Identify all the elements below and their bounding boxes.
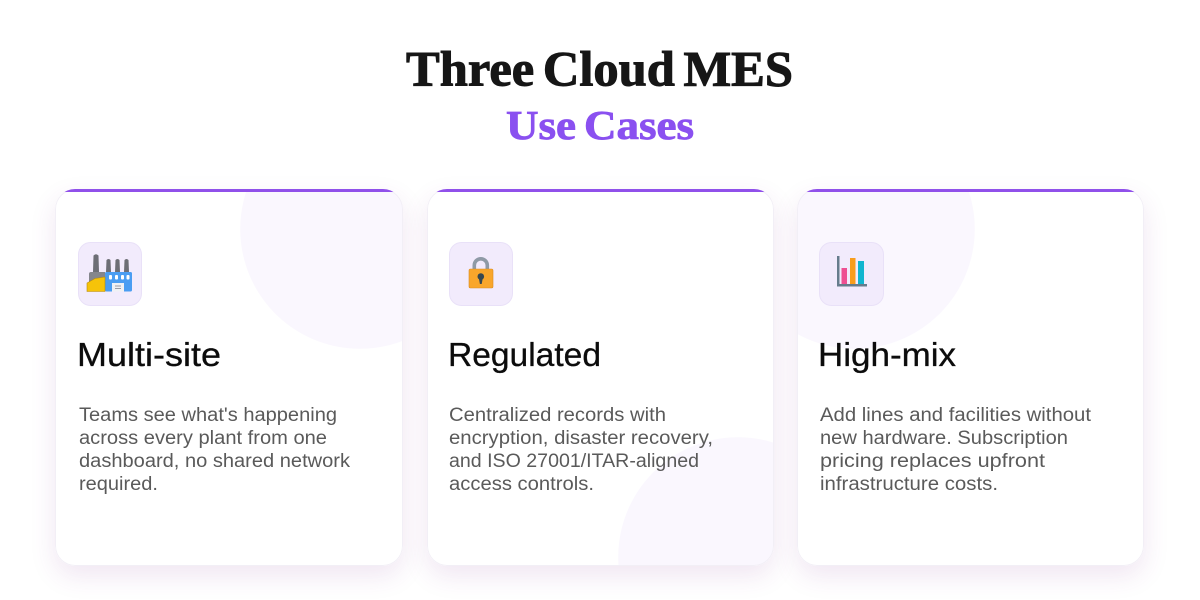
heading: multi-site: Multi-site xyxy=(77,336,221,373)
text: high-mix description: pricing replaces upfront xyxy=(820,451,1046,472)
text: multi-site description: across every plant from one xyxy=(79,428,327,449)
panel: regulated xyxy=(427,189,774,566)
icon: padlock xyxy=(450,242,512,306)
text: multi-site description: required. xyxy=(79,474,158,495)
panel: multi-site xyxy=(55,189,403,566)
text: regulated description xyxy=(449,405,713,495)
text: regulated description: access controls. xyxy=(449,474,594,495)
text: regulated description: Centralized records with xyxy=(449,405,666,426)
panel: high-mix xyxy=(797,189,1144,566)
text: regulated description: and ISO 27001/ITAR-aligned xyxy=(449,451,699,472)
heading: high-mix: High-mix xyxy=(818,336,957,373)
text: high-mix description: new hardware. Subscription xyxy=(820,428,1068,449)
text: high-mix description: infrastructure costs. xyxy=(820,474,998,495)
text: multi-site description: dashboard, no shared network xyxy=(79,451,351,472)
text: high-mix description xyxy=(820,405,1092,495)
text: multi-site description xyxy=(79,405,351,495)
title: Three Cloud MES xyxy=(406,40,793,96)
text: regulated description: encryption, disaster recovery, xyxy=(449,428,713,449)
heading: regulated: Regulated xyxy=(448,336,601,373)
subtitle: Use Cases xyxy=(506,102,694,148)
icon: bar chart xyxy=(820,242,884,306)
text: multi-site description: Teams see what's happening xyxy=(79,405,337,426)
icon: factory xyxy=(78,242,142,306)
text: high-mix description: Add lines and facilities without xyxy=(820,405,1092,426)
